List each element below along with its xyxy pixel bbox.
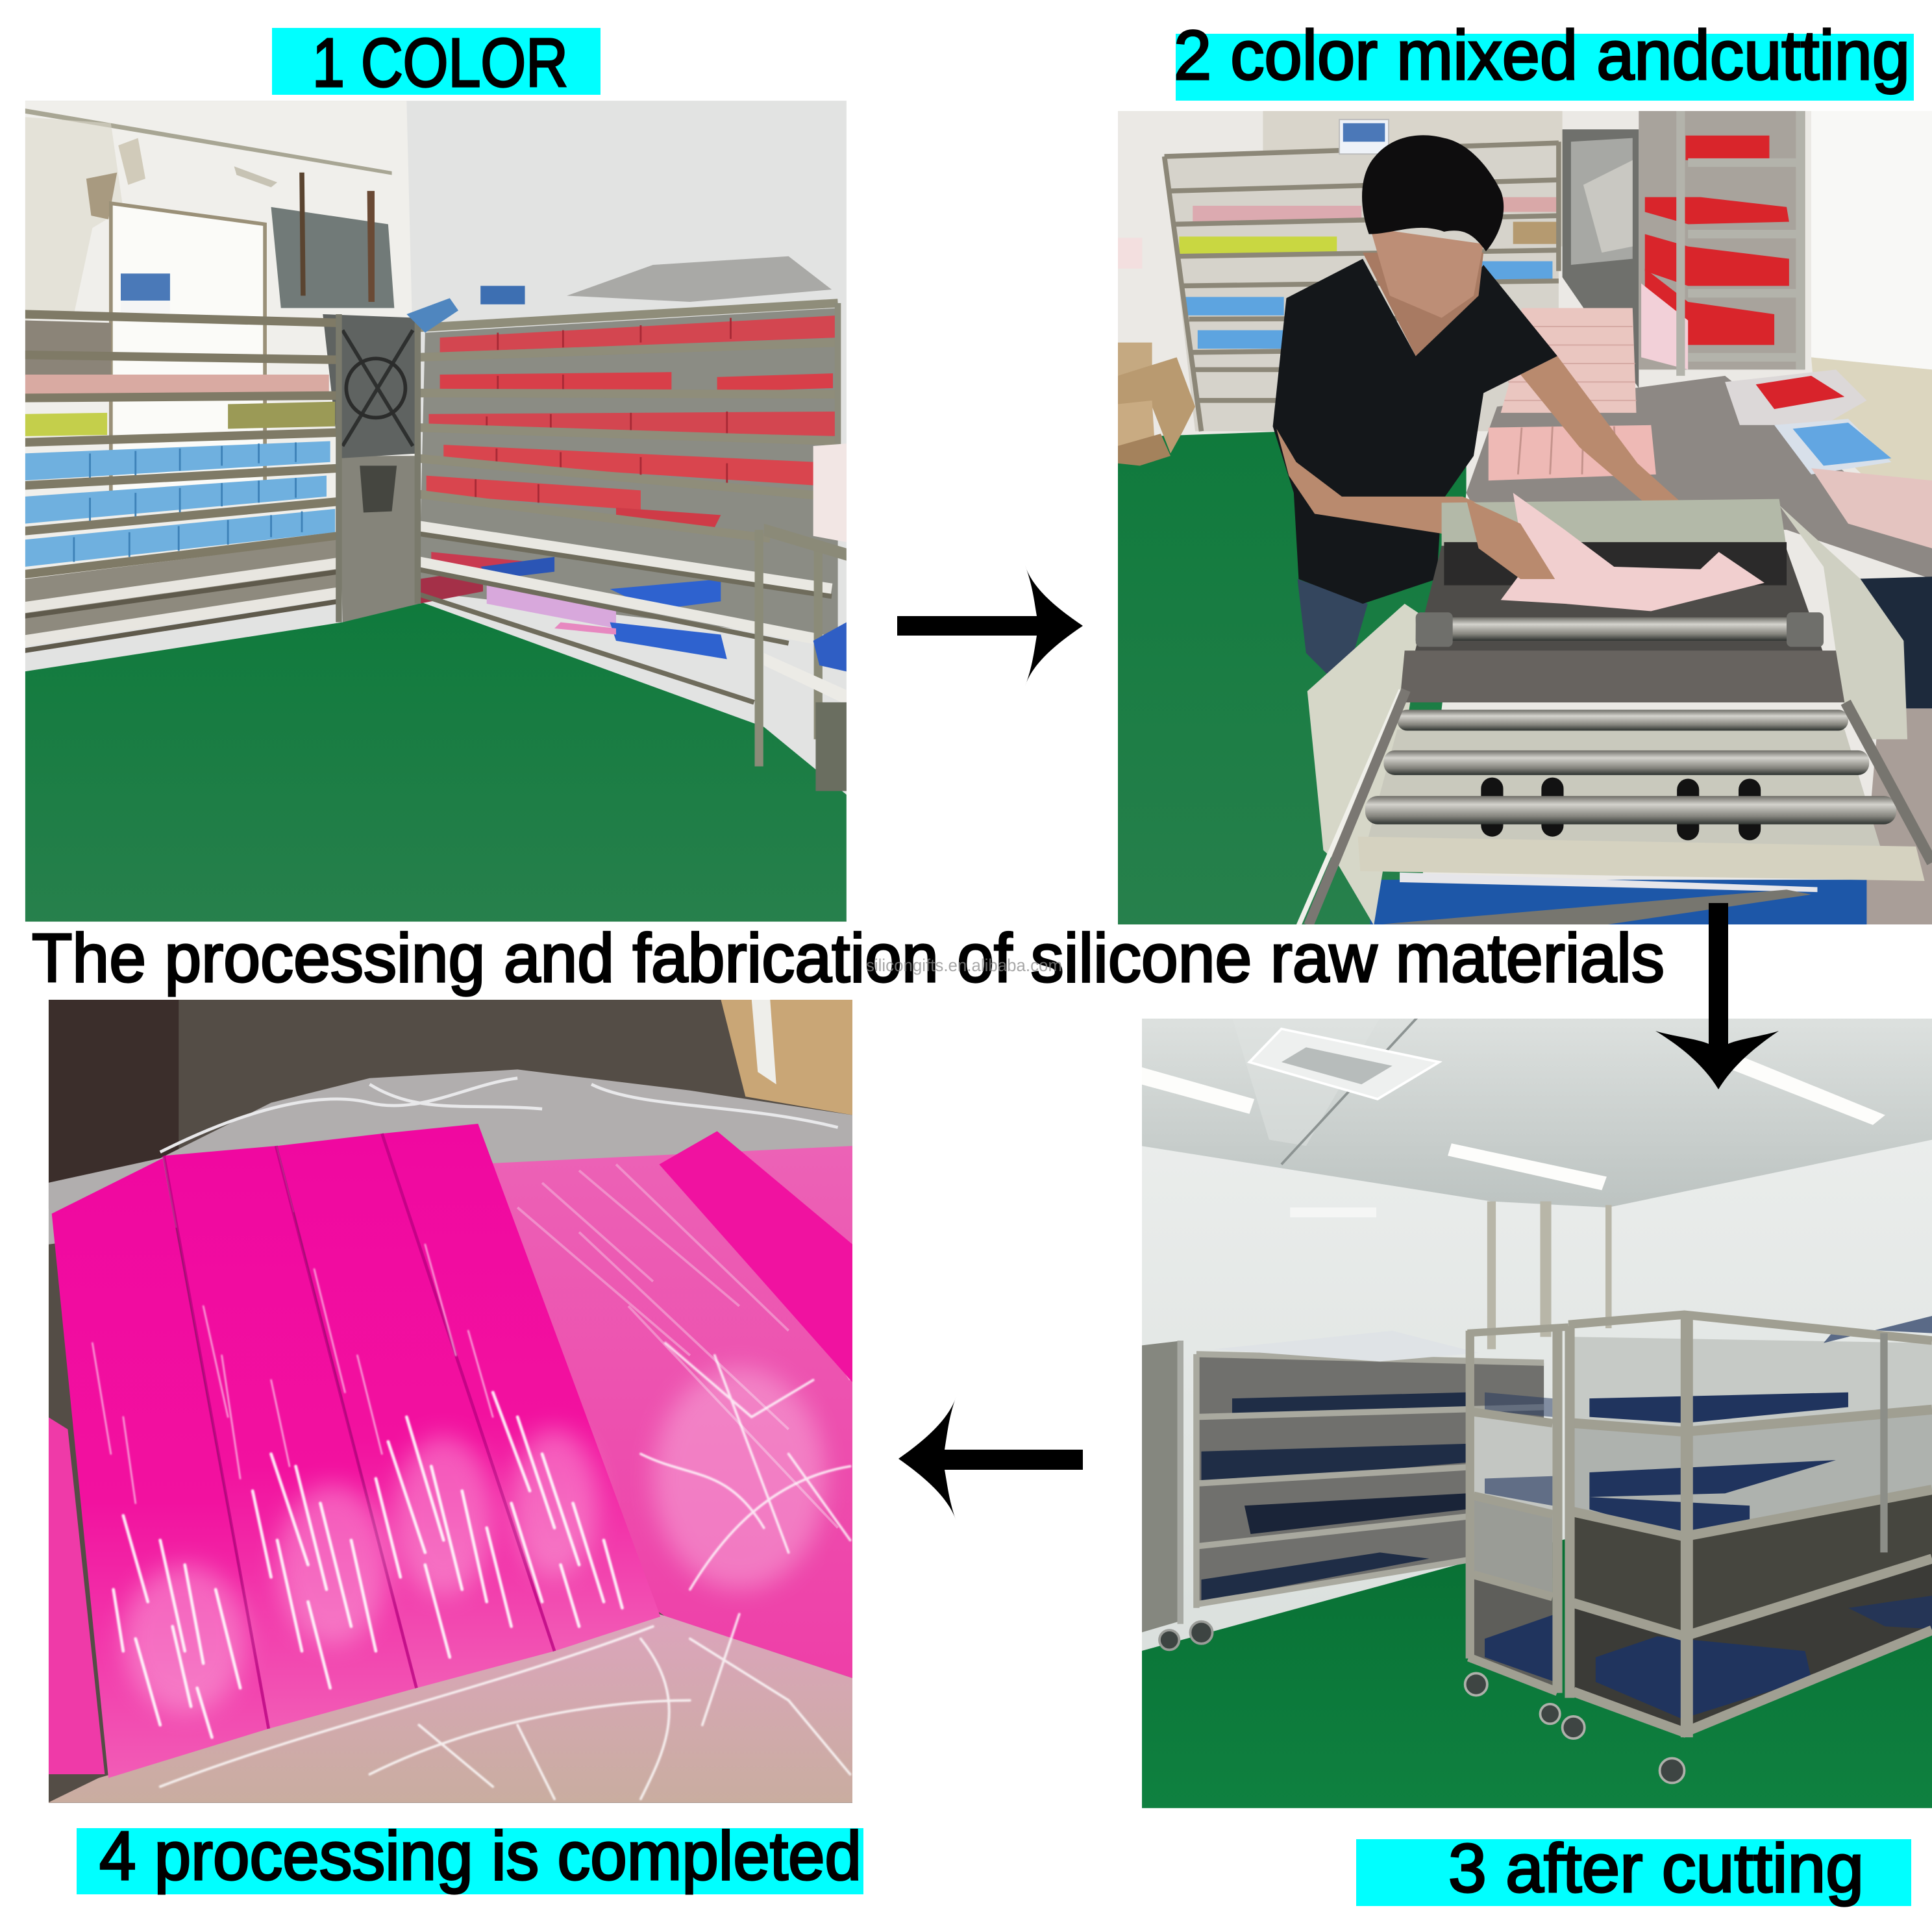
floor [25, 601, 847, 923]
dark stand right of machine [1848, 576, 1932, 708]
man: shirt [1273, 259, 1557, 604]
top clutter on shelf [567, 256, 832, 302]
man: neck and face [1363, 253, 1483, 356]
caption bar: 3 after cutting: 3 after cutting [1448, 1830, 1864, 1907]
blue stand [1370, 880, 1866, 925]
back shelf with product stacks [1165, 142, 1559, 431]
ceiling vent [1250, 1029, 1439, 1099]
jeans [1298, 579, 1368, 690]
back bagged pink [468, 1146, 852, 1678]
down arrow [1655, 903, 1779, 1089]
metal table [1467, 376, 1932, 579]
left side strip [48, 1417, 105, 1774]
dirty corner wall [339, 456, 419, 622]
clear plastic bag top [48, 1069, 852, 1245]
right arrow [897, 565, 1083, 686]
front rack stainless frame [1467, 1315, 1932, 1737]
hanging metal box [271, 207, 394, 308]
watermark: silicongifts.en.alibaba.com [866, 956, 1062, 975]
machine: lower panel with slots [1361, 730, 1885, 863]
machine: steel rollers [1365, 612, 1896, 824]
lower bag [48, 1614, 852, 1803]
machine: cream roller [1358, 837, 1925, 881]
pink silicone sheet [1501, 493, 1765, 611]
signs [121, 273, 170, 301]
right shelf: boards and red products [417, 303, 838, 702]
ceiling [1141, 1018, 1932, 1208]
rack wheels [1465, 1673, 1685, 1783]
left cart edge [1141, 1341, 1213, 1650]
pink strips [52, 1124, 660, 1778]
caption bar: 2 color mixed and cutting: 2 color mixed andcutting [1174, 16, 1910, 94]
ceiling lights [1141, 1055, 1885, 1190]
photo 1: storage shelves with coloured silicone sheets [25, 100, 848, 923]
caption bar: 1 COLOR: 1 COLOR [312, 25, 568, 101]
man: hair [1362, 135, 1504, 251]
machine: cream side bodies [1307, 499, 1907, 925]
fan unit [323, 314, 419, 458]
hands over sheet [1467, 499, 1555, 579]
title: the processing and fabrication of silicone raw materials: The processing and fabrication of silicone raw materials [32, 920, 1665, 997]
soft highlight wash on strips [123, 1368, 826, 1713]
machine: dark interior [1402, 546, 1841, 702]
left shelf: boards and products [25, 314, 339, 650]
machine: side rails [1298, 690, 1401, 925]
back shelving [1196, 1331, 1544, 1608]
photo 2: worker feeding silicone sheet through mixing and cutting machine [1117, 111, 1932, 925]
red-stocked rack [1639, 111, 1805, 376]
floor [1141, 1454, 1932, 1809]
photo 4: finished pink silicone strips in plastic bag [48, 999, 854, 1805]
green floor [1117, 425, 1467, 925]
top right pink strip [659, 1131, 852, 1383]
side table [759, 530, 818, 767]
caption bar: 4 processing is completed: 4 processing is completed [99, 1818, 861, 1894]
man: arms [1276, 356, 1728, 588]
cardboard boxes [1117, 343, 1195, 465]
front rack dark shelf faces [1468, 1337, 1932, 1733]
sign [1339, 119, 1389, 154]
fan housing [1563, 129, 1639, 388]
plastic glare streaks [92, 1245, 850, 1799]
left arrow [898, 1396, 1083, 1521]
stacked pink sheets [1489, 308, 1656, 480]
photo 3: clean room with stainless steel racks of cut sheets [1141, 1018, 1932, 1809]
bagged samples [1725, 369, 1932, 549]
front rack navy product bags [1485, 1316, 1932, 1719]
wall posts [1487, 1202, 1612, 1349]
